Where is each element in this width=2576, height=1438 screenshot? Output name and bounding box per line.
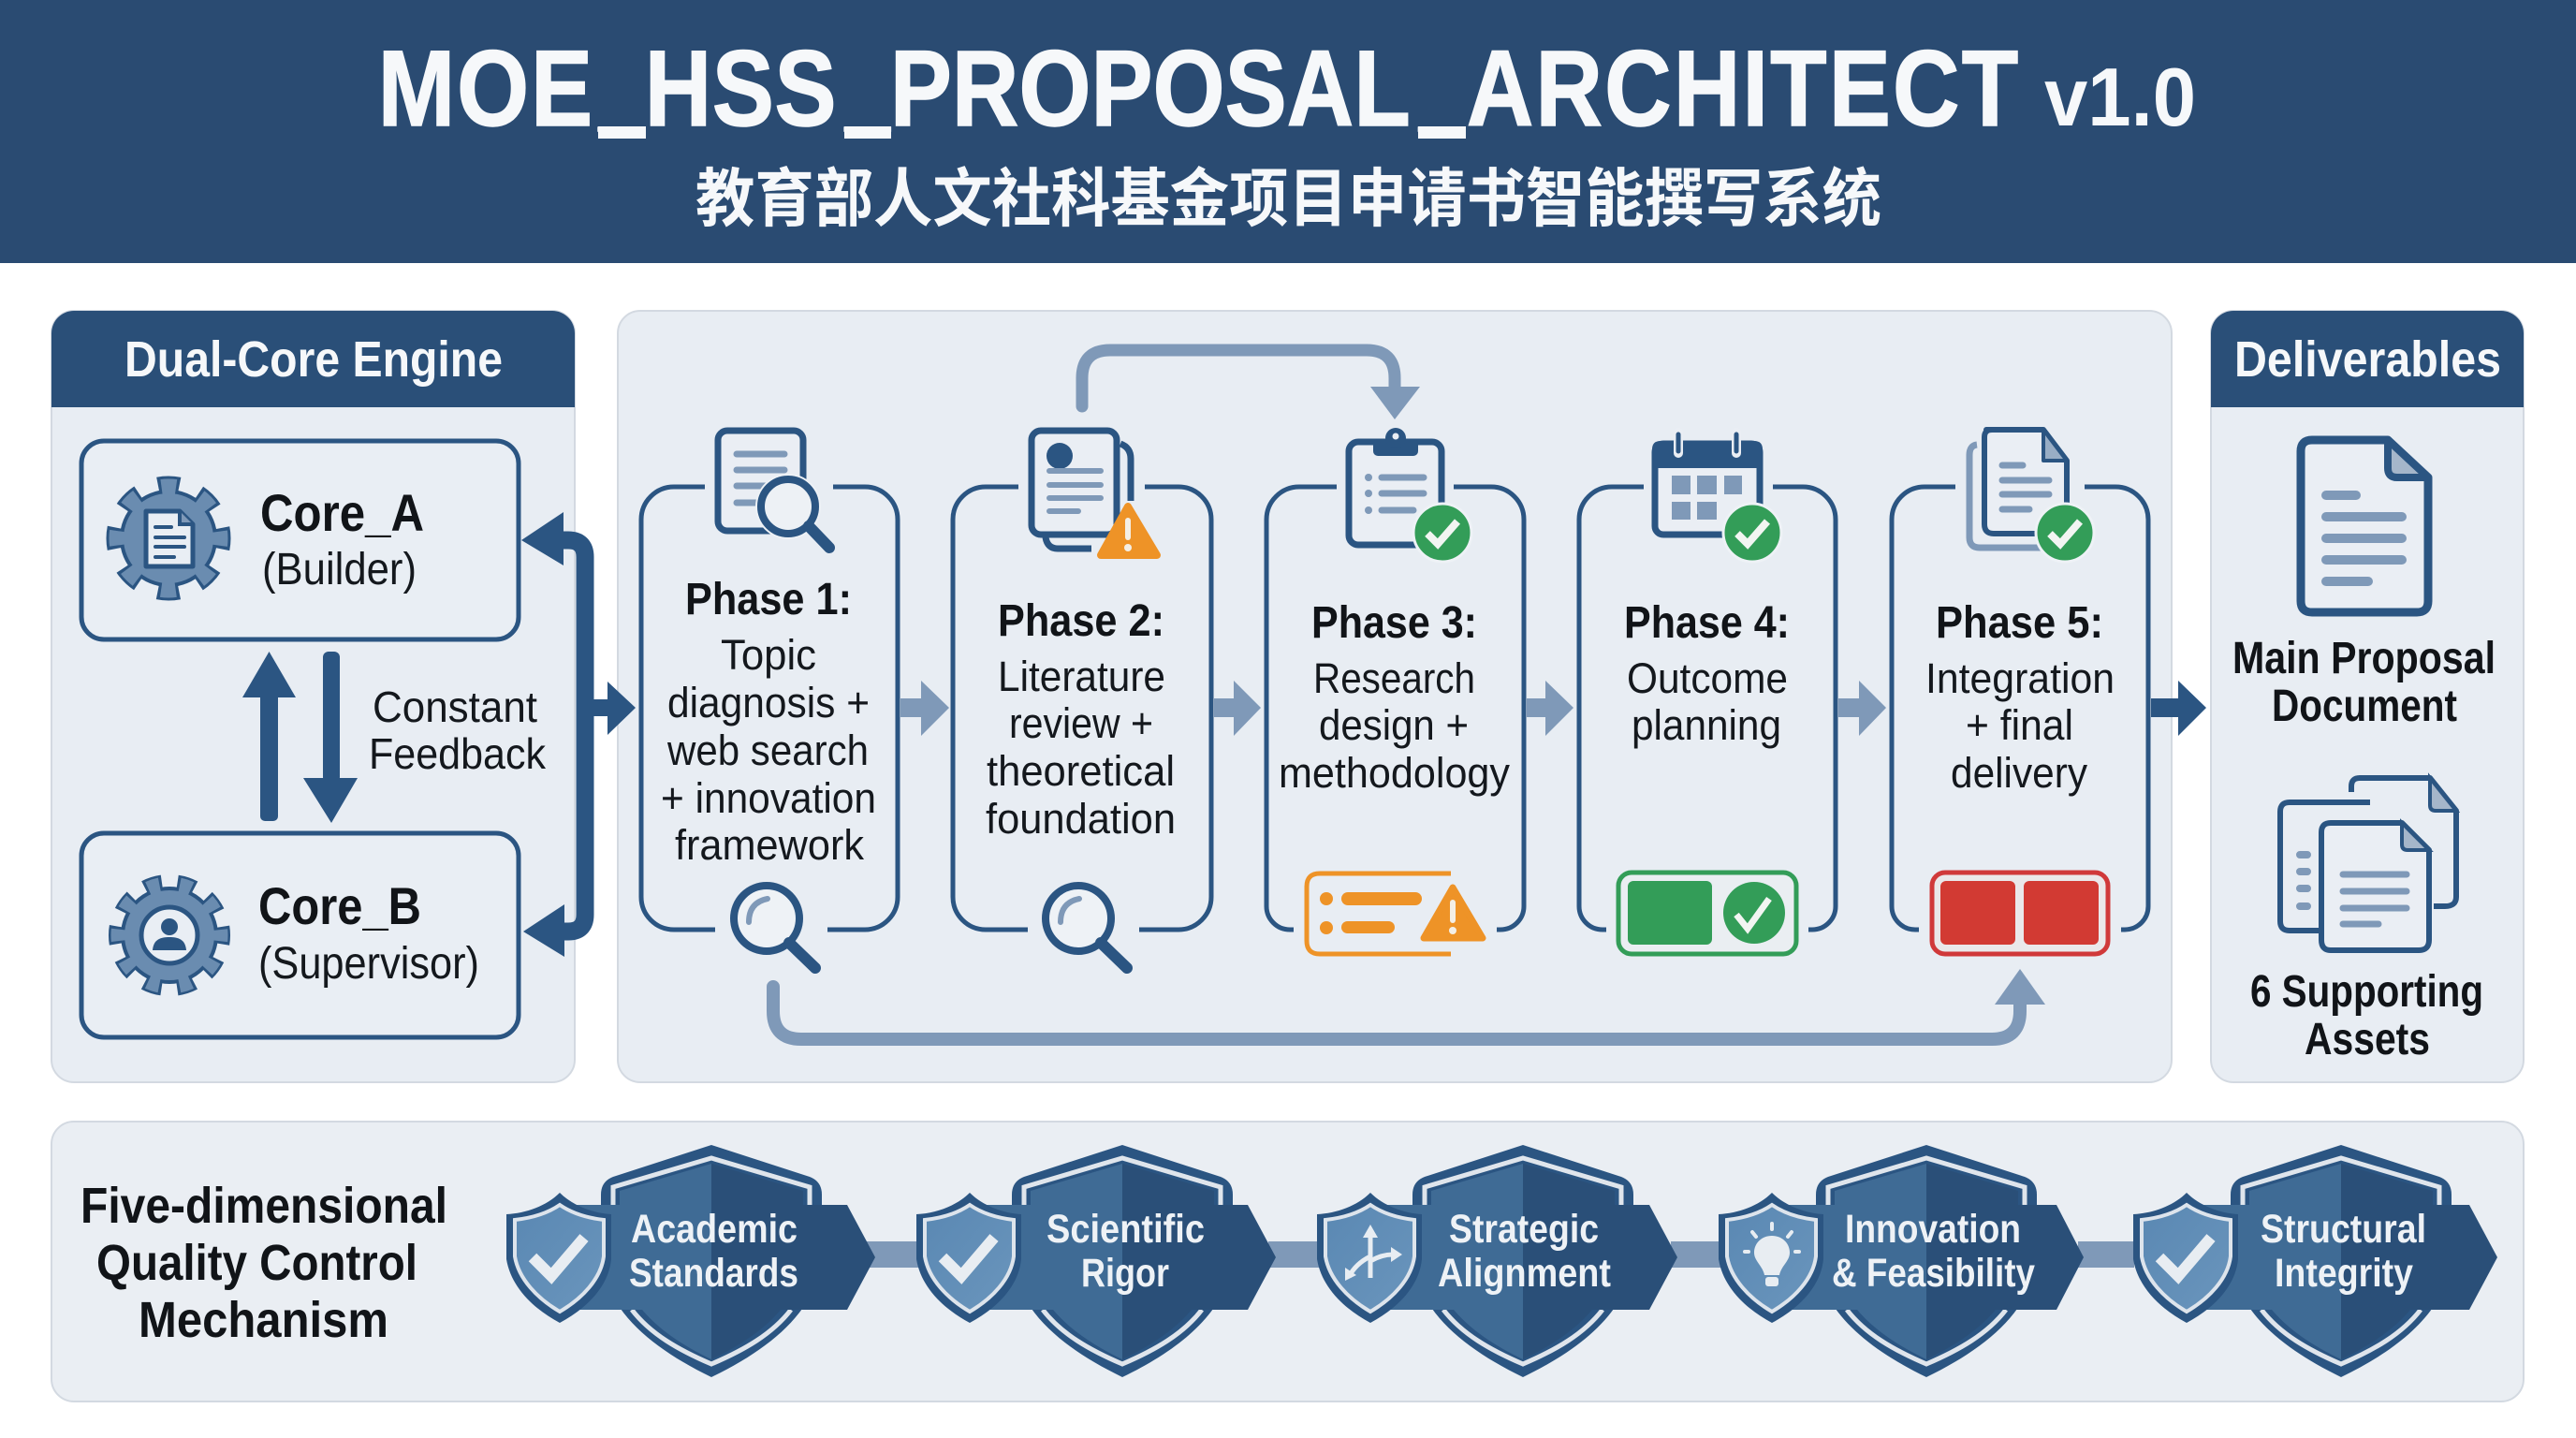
connector bars between shields [866, 1241, 2134, 1268]
arrow: phase 1 to phase 2 [900, 681, 949, 736]
badge: academic standards: Standards [629, 1251, 798, 1296]
phase 3 description: Research [1313, 654, 1475, 702]
main proposal label: Document [2272, 682, 2457, 731]
title [378, 28, 2020, 149]
panel heading: deliverables [2211, 311, 2524, 407]
badge: structural integrity: Structural [2261, 1207, 2426, 1252]
badge: scientific rigor [916, 1145, 1276, 1377]
panel: quality control mechanism [51, 1122, 2524, 1401]
quality control heading: Five-dimensional [80, 1178, 447, 1234]
phase 2 description: Literature [998, 653, 1165, 700]
panel: dual-core engine [51, 311, 575, 1082]
phase 5 description: Integration [1925, 654, 2115, 702]
badge: structural integrity [2133, 1145, 2497, 1377]
phase 4 heading: Phase 4: [1624, 598, 1790, 648]
arrow: feedback loop from phase 2 to phase 3 [1082, 350, 1420, 419]
Chinese subtitle: 教育部人文社科基金项目申请书智能撰写系统 [695, 164, 1881, 235]
icon: red status badge [1932, 873, 2108, 954]
title: ARCHITECT [1467, 28, 2020, 149]
phase 4 description: planning [1632, 701, 1781, 749]
constant feedback label: Constant [373, 682, 537, 731]
icon: gear with person [116, 882, 223, 989]
arrow: down from Core_A to Core_B [303, 652, 358, 823]
phase 5 heading: Phase 5: [1936, 598, 2103, 648]
arrow: phase 3 to phase 4 [1527, 681, 1573, 736]
phase 1 description: diagnosis + [667, 679, 870, 726]
version tag: v1.0 [2044, 51, 2196, 143]
title: _ [598, 36, 645, 139]
badge: structural integrity: Integrity [2275, 1251, 2413, 1296]
phase 5 description [1925, 654, 2115, 797]
Core_B label: Core_B [258, 876, 421, 935]
phase 2 description: theoretical [987, 747, 1175, 795]
title: PROPOSAL [890, 28, 1411, 149]
badge: academic standards [506, 1145, 875, 1377]
constant feedback label [369, 682, 547, 778]
header band [0, 0, 2576, 263]
phase 3 description [1279, 654, 1510, 797]
phase 1 description: + innovation [661, 774, 876, 822]
quality control heading [80, 1178, 447, 1348]
title: _ [1418, 36, 1465, 139]
constant feedback label: Feedback [369, 729, 547, 778]
main proposal label: Main Proposal [2232, 634, 2496, 683]
badge: strategic alignment [1317, 1145, 1677, 1377]
badge: scientific rigor: Rigor [1081, 1251, 1169, 1296]
icon: magnifier [734, 886, 815, 968]
phase 1 card [641, 431, 898, 968]
panel: deliverables [2211, 311, 2524, 1082]
badge: innovation and feasibility [1719, 1145, 2084, 1377]
Builder role: (Builder) [262, 545, 417, 594]
panel: phases workflow background [618, 311, 2172, 1082]
icon: clipboard with check [1349, 428, 1471, 562]
main proposal label [2232, 634, 2496, 731]
badge: innovation and feasibility: & Feasibility [1832, 1251, 2035, 1296]
icon: green status badge [1618, 873, 1796, 954]
arrow: loop from phase 1 to phase 5 [773, 969, 2045, 1039]
Supervisor role: (Supervisor) [258, 939, 479, 989]
arrow: phase 2 to phase 3 [1214, 681, 1261, 736]
phase 1 description: Topic [721, 631, 816, 679]
icon: magnifier [1046, 886, 1127, 968]
badge: academic standards: Academic [631, 1207, 798, 1252]
card: Core_A [81, 441, 519, 639]
phase 2 heading: Phase 2: [998, 596, 1164, 646]
phase 2 description: foundation [986, 795, 1176, 843]
phase 4 description: Outcome [1627, 654, 1788, 702]
phase 1 description: framework [675, 821, 864, 869]
title: _ [844, 36, 891, 139]
badge: strategic alignment: Alignment [1438, 1251, 1611, 1296]
panel heading: dual-core engine: Dual-Core Engine [124, 331, 503, 388]
phase 1 heading: Phase 1: [685, 575, 852, 624]
icon: document with magnifier [718, 431, 829, 548]
phase 2 description [986, 653, 1176, 843]
supporting assets label [2250, 967, 2483, 1064]
phase 3 description: design + [1319, 701, 1469, 749]
phase 1 description: web search [666, 726, 869, 774]
icon: supporting documents stack [2280, 778, 2456, 950]
quality control heading: Mechanism [139, 1292, 388, 1348]
phase 4 description [1627, 654, 1788, 749]
Core_A label: Core_A [260, 483, 424, 542]
badge: innovation and feasibility: Innovation [1845, 1207, 2021, 1252]
phase 2 card [953, 431, 1211, 968]
phase 3 heading: Phase 3: [1311, 598, 1477, 648]
panel heading: deliverables: Deliverables [2234, 331, 2501, 388]
quality control heading: Quality Control [96, 1235, 417, 1291]
phase 4 card [1579, 433, 1836, 954]
title: HSS [645, 28, 837, 149]
arrow: phase 4 to phase 5 [1838, 681, 1886, 736]
phase 3 card [1266, 428, 1524, 954]
phase 3 description: methodology [1279, 749, 1510, 797]
title: MOE [378, 28, 594, 149]
phase 5 card [1892, 430, 2148, 954]
icon: calendar with check [1652, 433, 1781, 562]
phase 5 description: + final [1966, 701, 2073, 749]
phase 5 description: delivery [1951, 749, 2087, 797]
icon: main proposal document [2301, 440, 2428, 612]
phase 2 description: review + [1009, 699, 1153, 747]
icon: stacked documents with check [1969, 430, 2094, 562]
icon: profile document with warning [1032, 431, 1157, 555]
badge: strategic alignment: Strategic [1449, 1207, 1599, 1252]
panel heading: dual-core engine [51, 311, 575, 407]
icon: orange warning list badge [1307, 873, 1483, 954]
phase 1 description [661, 631, 876, 869]
supporting assets label: Assets [2305, 1015, 2430, 1064]
icon: gear with document [114, 484, 223, 593]
supporting assets label: 6 Supporting [2250, 967, 2483, 1017]
badge: scientific rigor: Scientific [1046, 1207, 1205, 1252]
arrow: up from Core_B to Core_A [242, 652, 296, 821]
arrow: phase 5 to deliverables [2151, 681, 2206, 736]
arrow: bracket linking cores to phases [521, 512, 636, 957]
card: Core_B [81, 833, 519, 1037]
